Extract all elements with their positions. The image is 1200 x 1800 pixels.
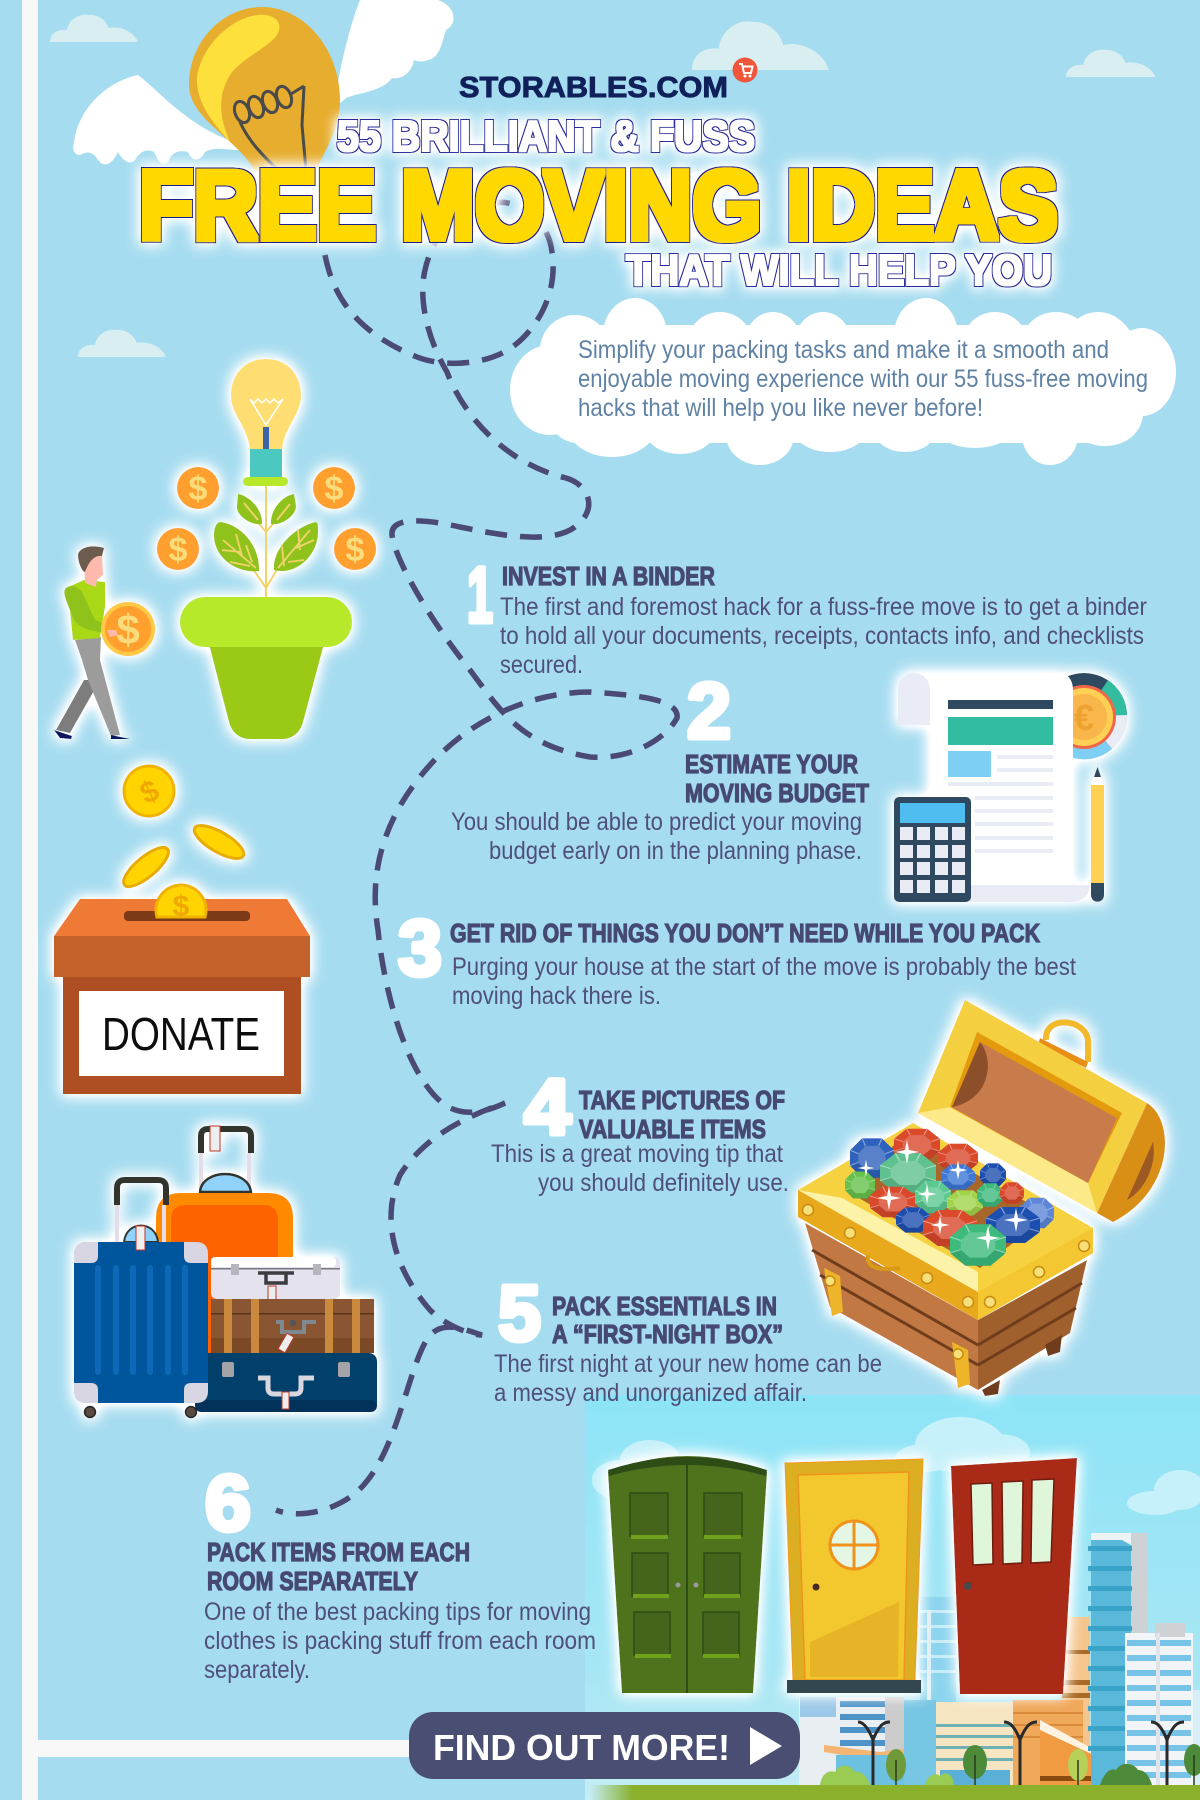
heading: A “FIRST-NIGHT BOX” xyxy=(552,1319,783,1349)
donut chart: € xyxy=(1074,697,1094,738)
intro text: hacks that will help you like never before! xyxy=(578,394,983,422)
body text: you should definitely use. xyxy=(538,1169,789,1197)
yellow door xyxy=(785,1459,923,1693)
storables.com wordmark: STORABLES.COM xyxy=(459,72,728,104)
bulb body xyxy=(189,7,340,172)
left white building xyxy=(799,1697,933,1785)
coins: $ xyxy=(169,531,188,569)
lid handle xyxy=(1046,1022,1088,1062)
lid interior xyxy=(952,1042,1117,1183)
step 1 xyxy=(467,550,1147,679)
title xyxy=(139,112,1058,295)
heading: PACK ESSENTIALS IN xyxy=(552,1291,777,1321)
brown case xyxy=(211,1299,374,1353)
lid frame xyxy=(918,1000,1147,1213)
stem and leaves xyxy=(214,486,318,598)
body text: This is a great moving tip that xyxy=(491,1140,783,1168)
body text xyxy=(451,808,862,865)
falling coins xyxy=(118,766,248,893)
ground xyxy=(590,1785,1200,1800)
number 5: 5 xyxy=(498,1268,541,1357)
intro cloud xyxy=(510,298,1176,465)
body text: The first night at your new home can be xyxy=(494,1350,882,1378)
donate label xyxy=(79,991,284,1076)
body text: clothes is packing stuff from each room xyxy=(204,1627,596,1655)
icon: play arrow xyxy=(750,1727,782,1765)
body text: You should be able to predict your moving xyxy=(451,808,862,836)
filament xyxy=(232,84,306,170)
shoes xyxy=(54,730,130,739)
heading: INVEST IN A BINDER xyxy=(502,561,715,591)
number 3: 3 xyxy=(398,903,442,992)
coin entering slot xyxy=(156,885,206,923)
step 3 xyxy=(398,903,1076,1010)
trees xyxy=(820,1744,1200,1785)
heading: MOVING BUDGET xyxy=(685,778,869,808)
white case xyxy=(211,1257,340,1304)
body text xyxy=(494,1350,882,1407)
heading xyxy=(207,1537,470,1596)
body text: separately. xyxy=(204,1656,310,1684)
heading: ROOM SEPARATELY xyxy=(207,1566,418,1596)
red door xyxy=(951,1458,1077,1694)
sky xyxy=(585,1395,1200,1800)
number 1: 1 xyxy=(467,550,493,639)
coin entering slot: $ xyxy=(173,890,190,923)
step 5 xyxy=(494,1268,882,1407)
chest wood right xyxy=(978,1260,1087,1390)
torso xyxy=(66,580,105,640)
icon: cart badge xyxy=(732,58,758,82)
title line 1: 55 BRILLIANT & FUSS xyxy=(337,112,755,161)
step 4 xyxy=(491,1062,789,1197)
step 2 xyxy=(451,666,869,865)
white tower right xyxy=(1125,1623,1200,1785)
illustration: budget document xyxy=(894,673,1127,902)
illustration: money plant xyxy=(157,359,376,739)
glowing bulb xyxy=(231,359,301,486)
illustration: doors xyxy=(608,1456,1077,1694)
pot xyxy=(180,597,352,739)
box lid xyxy=(54,899,310,936)
button: find out more xyxy=(409,1712,800,1779)
paper xyxy=(898,673,1090,902)
legs xyxy=(56,680,100,733)
heading xyxy=(579,1085,785,1144)
donut chart xyxy=(1041,673,1127,759)
button label: FIND OUT MORE! xyxy=(433,1727,730,1768)
blue glass tower xyxy=(1088,1533,1148,1785)
green door xyxy=(608,1456,767,1693)
heading xyxy=(685,749,869,808)
cream building xyxy=(936,1702,1013,1785)
glass tower left xyxy=(904,1597,956,1785)
pencil xyxy=(1091,767,1104,902)
orange case xyxy=(156,1126,293,1380)
heading: VALUABLE ITEMS xyxy=(579,1114,766,1144)
sky clouds xyxy=(592,1417,1200,1515)
number 2: 2 xyxy=(687,666,731,755)
donate label: DONATE xyxy=(102,1008,260,1060)
navy case xyxy=(195,1353,377,1412)
head xyxy=(84,555,103,587)
coins: $ xyxy=(325,470,344,508)
step 6 xyxy=(204,1458,596,1684)
body text: a messy and unorganized affair. xyxy=(494,1379,807,1407)
heading xyxy=(552,1291,783,1349)
body text: budget early on in the planning phase. xyxy=(489,837,862,865)
illustration: donate box xyxy=(54,766,310,1094)
heading: TAKE PICTURES OF xyxy=(579,1085,785,1115)
coins: $ xyxy=(346,531,365,569)
street lamps xyxy=(858,1722,1184,1785)
falling coins: $ xyxy=(135,774,164,811)
body text xyxy=(452,953,1076,1010)
heading: ESTIMATE YOUR xyxy=(685,749,858,779)
right wing xyxy=(334,0,454,110)
illustration: treasure chest xyxy=(798,1000,1165,1396)
lid end cap xyxy=(1097,1103,1165,1222)
heading: PACK ITEMS FROM EACH xyxy=(207,1537,470,1567)
coins xyxy=(157,467,376,570)
body text xyxy=(500,593,1147,679)
title line 2: FREE MOVING IDEAS xyxy=(139,150,1058,260)
illustration: man carrying coin xyxy=(54,546,155,739)
feet and straps xyxy=(982,1335,1062,1396)
winged light bulb xyxy=(73,0,454,172)
body text xyxy=(491,1140,789,1197)
heading: GET RID OF THINGS YOU DON’T NEED WHILE YOU PACK xyxy=(450,918,1040,948)
background clouds xyxy=(50,15,1155,357)
number 6: 6 xyxy=(205,1458,251,1547)
blue case xyxy=(74,1180,208,1418)
body text: Purging your house at the start of the move is probably the best xyxy=(452,953,1076,981)
box body xyxy=(63,977,301,1094)
site logo xyxy=(459,58,758,104)
illustration: city scene xyxy=(585,1395,1200,1800)
body text: secured. xyxy=(500,651,583,679)
body text: moving hack there is. xyxy=(452,982,661,1010)
title line 3: THAT WILL HELP YOU xyxy=(626,246,1052,295)
orange buildings xyxy=(1013,1617,1100,1785)
calculator xyxy=(894,797,971,902)
dashed route xyxy=(276,202,677,1514)
chest wood left xyxy=(805,1223,978,1390)
number 4: 4 xyxy=(524,1062,571,1151)
coins: $ xyxy=(189,470,208,508)
illustration: luggage xyxy=(74,1126,377,1418)
chest rim xyxy=(798,1123,1093,1320)
illustration: man carrying coin: $ xyxy=(116,606,140,653)
rim rivets and handle xyxy=(802,1204,1090,1359)
bulb highlight xyxy=(197,15,279,142)
white frame stripes xyxy=(22,0,422,1800)
chest opening xyxy=(845,1135,1050,1268)
gems xyxy=(845,1129,1054,1266)
body text xyxy=(204,1598,596,1684)
left wing xyxy=(73,75,240,164)
intro text xyxy=(578,336,1148,422)
intro text: Simplify your packing tasks and make it a smooth and xyxy=(578,336,1109,364)
cloud shape xyxy=(510,298,1176,465)
body text: One of the best packing tips for moving xyxy=(204,1598,591,1626)
body text: to hold all your documents, receipts, contacts info, and checklists xyxy=(500,622,1144,650)
coin xyxy=(101,602,155,656)
